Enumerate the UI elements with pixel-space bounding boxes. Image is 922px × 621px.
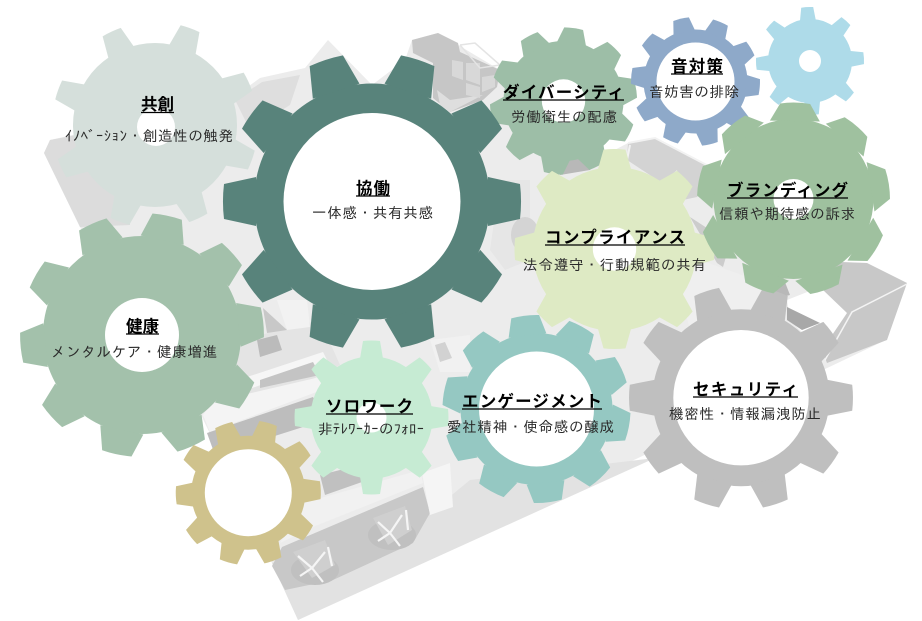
gear: エンゲージメント [441, 313, 632, 505]
label: セキュリティ: 機密性・情報漏洩防止 [669, 407, 821, 423]
label: 協働 [312, 179, 433, 222]
label: エンゲージメント: 愛社精神・使命感の醸成 [447, 419, 614, 436]
label: ブランディング [719, 180, 855, 223]
gear: ダイバーシティ [488, 26, 639, 176]
gear: 共創 [53, 23, 257, 227]
label: ソロワーク: 非ﾃﾚﾜｰｶｰのﾌｫﾛｰ [318, 422, 424, 438]
label: 健康: 健康 [126, 317, 159, 336]
gear: ソロワーク [295, 341, 448, 494]
label: エンゲージメント: エンゲージメント [462, 392, 602, 411]
gear: コンプライアンス [514, 149, 715, 349]
gear: セキュリティ [629, 286, 853, 510]
label: ソロワーク: ソロワーク [326, 397, 413, 416]
label: セキュリティ [669, 381, 821, 423]
label: 共創: ｲﾉﾍﾞｰｼｮﾝ・創造性の触発 [65, 128, 233, 145]
gear: 健康 [18, 211, 266, 459]
label: ダイバーシティ: ダイバーシティ [503, 82, 624, 102]
label: ソロワーク [318, 397, 424, 438]
label: ブランディング: ブランディング [727, 180, 848, 200]
label: 協働: 協働 [356, 179, 390, 198]
label: コンプライアンス [523, 228, 706, 274]
gear: ブランディング [694, 102, 893, 298]
label: ダイバーシティ: 労働衛生の配慮 [511, 109, 617, 126]
label: 音対策: 音対策 [671, 56, 724, 76]
gear: 協働 [223, 52, 521, 351]
icon: office chair left [291, 540, 339, 585]
label: ダイバーシティ [503, 82, 624, 126]
label: 健康 [51, 317, 218, 361]
label: 協働: 一体感・共有共感 [312, 205, 433, 222]
gear: 音対策 [630, 16, 761, 147]
label: 音対策: 音妨害の排除 [649, 84, 740, 101]
label: コンプライアンス: 法令遵守・行動規範の共有 [523, 257, 706, 274]
label: コンプライアンス: コンプライアンス [545, 228, 685, 247]
icon: office chair right [368, 506, 416, 550]
label: 音対策 [649, 56, 740, 101]
label: 健康: メンタルケア・健康増進 [51, 344, 218, 361]
label: エンゲージメント [447, 392, 614, 436]
gear: light blue blank [756, 7, 864, 115]
label: 共創 [65, 95, 233, 145]
label: 共創: 共創 [141, 95, 174, 114]
label: ブランディング: 信頼や期待感の訴求 [719, 207, 855, 223]
label: セキュリティ: セキュリティ [693, 381, 798, 399]
gear: gold blank [175, 420, 321, 566]
